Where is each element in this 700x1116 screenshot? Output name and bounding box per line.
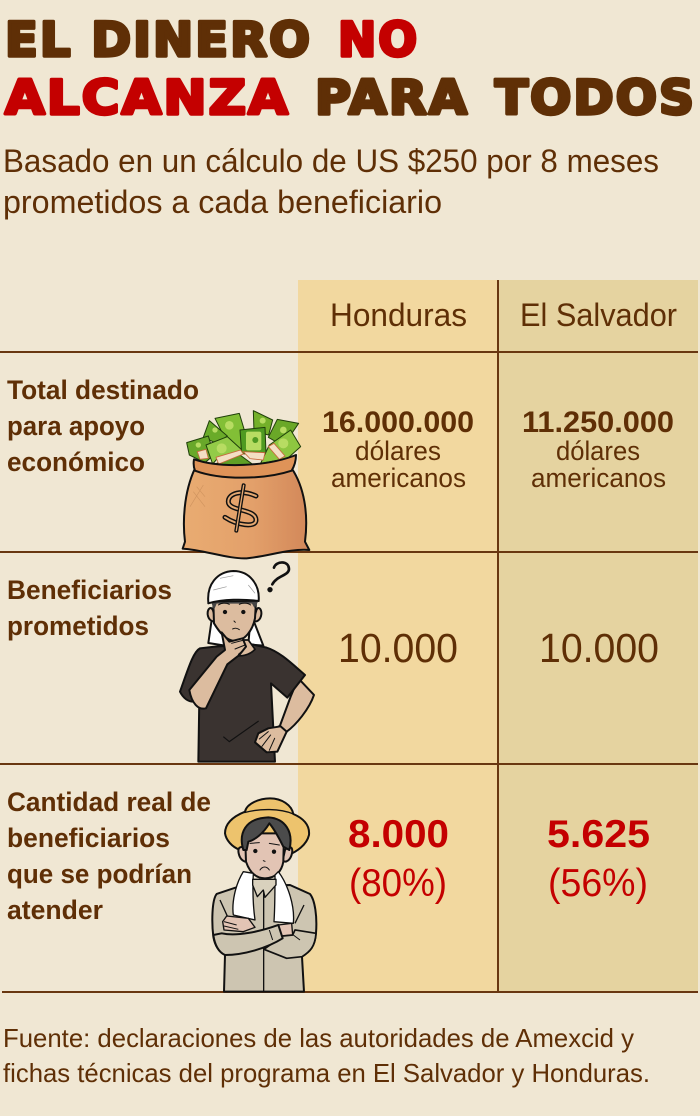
value: El Salvador real: 5.625 bbox=[547, 813, 650, 856]
value: El Salvador total bbox=[522, 406, 674, 493]
value: Honduras real: (80%) bbox=[349, 862, 447, 905]
column headers: Honduras bbox=[330, 297, 467, 333]
source note bbox=[3, 1023, 650, 1088]
icon: money bag bbox=[183, 411, 309, 558]
icon: thinking man bbox=[180, 562, 314, 762]
source note: Fuente: declaraciones de las autoridades de Amexcid y bbox=[3, 1023, 634, 1053]
title: PARA bbox=[315, 71, 469, 126]
value: Honduras promised: 10.000 bbox=[338, 625, 458, 671]
value: El Salvador total: dólares bbox=[556, 436, 640, 466]
row label: total destinado: para apoyo bbox=[7, 411, 145, 441]
title: EL DINERO bbox=[5, 13, 312, 68]
row label: cantidad real: Cantidad real de bbox=[7, 787, 211, 817]
value: El Salvador total: 11.250.000 bbox=[522, 406, 674, 439]
value: Honduras real: 8.000 bbox=[348, 813, 449, 856]
row label: cantidad real: que se podrían bbox=[7, 859, 192, 889]
value: Honduras total bbox=[322, 406, 474, 493]
column headers: El Salvador bbox=[520, 297, 677, 333]
value: Honduras total: americanos bbox=[331, 463, 466, 493]
row label: beneficiarios prometidos: Beneficiarios bbox=[7, 575, 172, 605]
source note: fichas técnicas del programa en El Salvador y Honduras. bbox=[3, 1058, 650, 1088]
title: TODOS bbox=[495, 71, 696, 126]
row label: total destinado: Total destinado bbox=[7, 375, 199, 405]
subtitle bbox=[3, 143, 659, 220]
value: El Salvador total: americanos bbox=[531, 463, 666, 493]
subtitle: prometidos a cada beneficiario bbox=[3, 184, 442, 220]
panel: Honduras column bbox=[298, 280, 498, 992]
row label: beneficiarios prometidos bbox=[7, 575, 172, 641]
panel: El Salvador column bbox=[498, 280, 698, 992]
column headers bbox=[330, 297, 677, 333]
title: NO bbox=[338, 13, 419, 68]
row label: cantidad real: beneficiarios bbox=[7, 823, 170, 853]
row label: total destinado: económico bbox=[7, 447, 145, 477]
value: Honduras total: dólares bbox=[355, 436, 441, 466]
row label: cantidad real: atender bbox=[7, 895, 103, 925]
row label: total destinado bbox=[7, 375, 199, 477]
title: ALCANZA bbox=[5, 71, 290, 126]
value: Honduras total: 16.000.000 bbox=[322, 406, 474, 439]
value: El Salvador real: (56%) bbox=[548, 862, 648, 905]
title bbox=[5, 13, 696, 126]
value: El Salvador real bbox=[547, 813, 650, 905]
row label: beneficiarios prometidos: prometidos bbox=[7, 611, 149, 641]
icon: man with straw hat bbox=[212, 798, 316, 992]
value: Honduras real bbox=[348, 813, 449, 905]
subtitle: Basado en un cálculo de US $250 por 8 meses bbox=[3, 143, 659, 179]
row label: cantidad real bbox=[7, 787, 211, 925]
value: El Salvador promised: 10.000 bbox=[539, 625, 659, 671]
